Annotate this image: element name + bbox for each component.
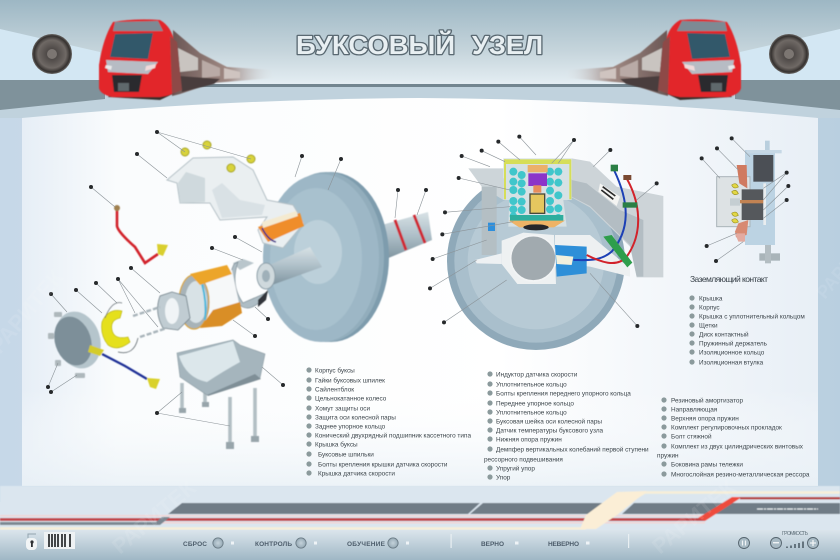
parts list: column one: Цельнокатанное колесо — [315, 396, 387, 402]
button: reset — [183, 538, 234, 548]
button: reset: СБРОС — [183, 541, 207, 548]
parts list: grounding contact: Крышка с уплотнительный кольцом — [699, 312, 805, 320]
header background — [0, 0, 840, 130]
icon: padlock — [26, 534, 37, 550]
parts list: column two: Демпфер вертикальных колебаний первой ступени — [496, 446, 649, 454]
parts list: grounding contact: Щетки — [699, 322, 718, 330]
parts list: column one: Буксовые шпильки — [318, 452, 374, 458]
exploded view: axle box housing — [167, 157, 304, 248]
parts list: column one: Корпус буксы — [315, 366, 355, 374]
icon: right speaker — [769, 34, 809, 74]
bearing housing — [502, 233, 630, 284]
parts list: column one: Болты крепления крышки датчика скорости — [318, 462, 448, 468]
exploded view: red hose — [114, 205, 168, 263]
parts list: column one: Крышка датчика скорости — [318, 470, 395, 478]
parts list: column one: Сайлентблок — [315, 386, 354, 394]
section view: axle box on wheel — [447, 158, 663, 350]
exploded view: yellow nuts — [181, 141, 255, 172]
parts list: column two: Переднее упорное кольцо — [496, 400, 574, 408]
watermarks: РАРИТЕК — [107, 475, 201, 559]
title: БУКСОВЫЙ — [296, 30, 455, 60]
parts list: column one: Хомут защиты оси — [315, 406, 370, 412]
parts list: column two: рессорного подвешивания — [484, 456, 563, 464]
indicator: incorrect — [548, 534, 629, 548]
parts list: column two: Упругий упор — [496, 464, 535, 472]
parts list: grounding contact: Корпус — [699, 304, 720, 312]
bogie frame — [468, 158, 663, 277]
main white panel — [22, 98, 818, 486]
parts list: column two: Датчик температуры буксового узла — [496, 426, 604, 434]
parts list: grounding contact: Диск контактный — [699, 330, 749, 338]
parts list: grounding contact — [689, 295, 805, 366]
left train — [99, 19, 274, 100]
button: training: ОБУЧЕНИЕ — [347, 541, 386, 548]
exploded view: sensor cover and blue wire — [48, 306, 160, 389]
indicator: correct — [450, 534, 518, 548]
volume control — [770, 531, 818, 548]
indicator: incorrect: НЕВЕРНО — [548, 541, 579, 548]
sensor cables — [573, 165, 638, 267]
parts list: column three: Многослойная резино-металлическая рессора — [671, 470, 810, 478]
wheel disc — [447, 172, 625, 350]
leader lines: exploded view — [48, 132, 426, 426]
leader lines: section view — [430, 137, 657, 326]
parts list: grounding contact: Изоляционное кольцо — [699, 350, 765, 356]
spring assembly — [503, 158, 572, 230]
title: УЗЕЛ — [472, 30, 543, 60]
label markers: section view — [428, 135, 659, 328]
footer track graphic — [0, 486, 840, 530]
parts list: column two — [484, 371, 649, 482]
parts list: column three: пружин — [657, 452, 679, 460]
button: training — [347, 538, 409, 548]
grounding contact heading: Заземляющий контакт — [690, 274, 768, 284]
parts list: column one — [306, 366, 471, 478]
button: pause — [738, 538, 750, 548]
parts list: column two: Индуктор датчика скорости — [496, 372, 578, 378]
button: control: КОНТРОЛЬ — [255, 541, 292, 548]
parts list: column one: Защита оси колесной пары — [315, 414, 396, 422]
parts list: column three: Боковина рамы тележки — [671, 462, 743, 468]
parts list: column three: Комплект регулировочных прокладок — [671, 424, 782, 432]
parts list: column two: Болты крепления переднего упорного кольца — [496, 390, 631, 398]
parts list: column three: Резиновый амортизатор — [671, 396, 743, 404]
title — [296, 30, 543, 60]
parts list: column three: Направляющая — [671, 406, 718, 414]
parts list: column one: Конический двухрядный подшипник кассетного типа — [315, 432, 471, 440]
parts list: column three: Комплект из двух цилиндрических винтовых — [671, 444, 804, 450]
indicator: correct: ВЕРНО — [481, 541, 504, 548]
exploded view: cassette bearing — [179, 259, 268, 329]
side and footer background — [0, 118, 840, 502]
parts list: column two: Уплотнительное кольцо — [496, 382, 567, 388]
right train — [566, 19, 741, 100]
volume control: ГРОМКОСТЬ — [782, 531, 809, 537]
parts list: column three: Верхняя опора пружин — [671, 416, 739, 422]
exploded view: wheel and axle — [257, 172, 432, 342]
footer control strip — [0, 530, 840, 560]
watermarks: РАРИТЕК — [647, 475, 741, 559]
parts list: column two: Уплотнительное кольцо — [496, 410, 567, 416]
button: control — [255, 538, 317, 548]
barcode — [44, 532, 75, 549]
parts list: column one: Крышка буксы — [315, 440, 358, 448]
icon: left speaker — [32, 34, 72, 74]
exploded view: yellow retaining part and wire ring — [102, 303, 138, 353]
parts list: column one: Гайки буксовых шпилек — [315, 376, 385, 384]
watermarks — [0, 226, 840, 559]
parts list: column two: Буксовая шейка оси колесной пары — [496, 418, 602, 426]
label markers: exploded view — [46, 130, 428, 415]
parts list: grounding contact: Изоляционная втулка — [699, 360, 764, 366]
parts list: column two: Нижняя опора пружин — [496, 436, 562, 444]
parts list: column three — [657, 396, 810, 478]
grounding contact section diagram — [700, 136, 790, 263]
parts list: column two: Упор — [496, 474, 511, 482]
parts list: column three: Болт стяжной — [671, 432, 712, 440]
parts list: grounding contact: Крышка — [699, 296, 723, 302]
parts list: column one: Заднее упорное кольцо — [315, 424, 386, 430]
exploded view: rear stop ring and studs — [133, 292, 190, 337]
parts list: grounding contact: Пружинный держатель — [699, 340, 768, 348]
exploded view: lower housing and bolts — [177, 340, 265, 449]
